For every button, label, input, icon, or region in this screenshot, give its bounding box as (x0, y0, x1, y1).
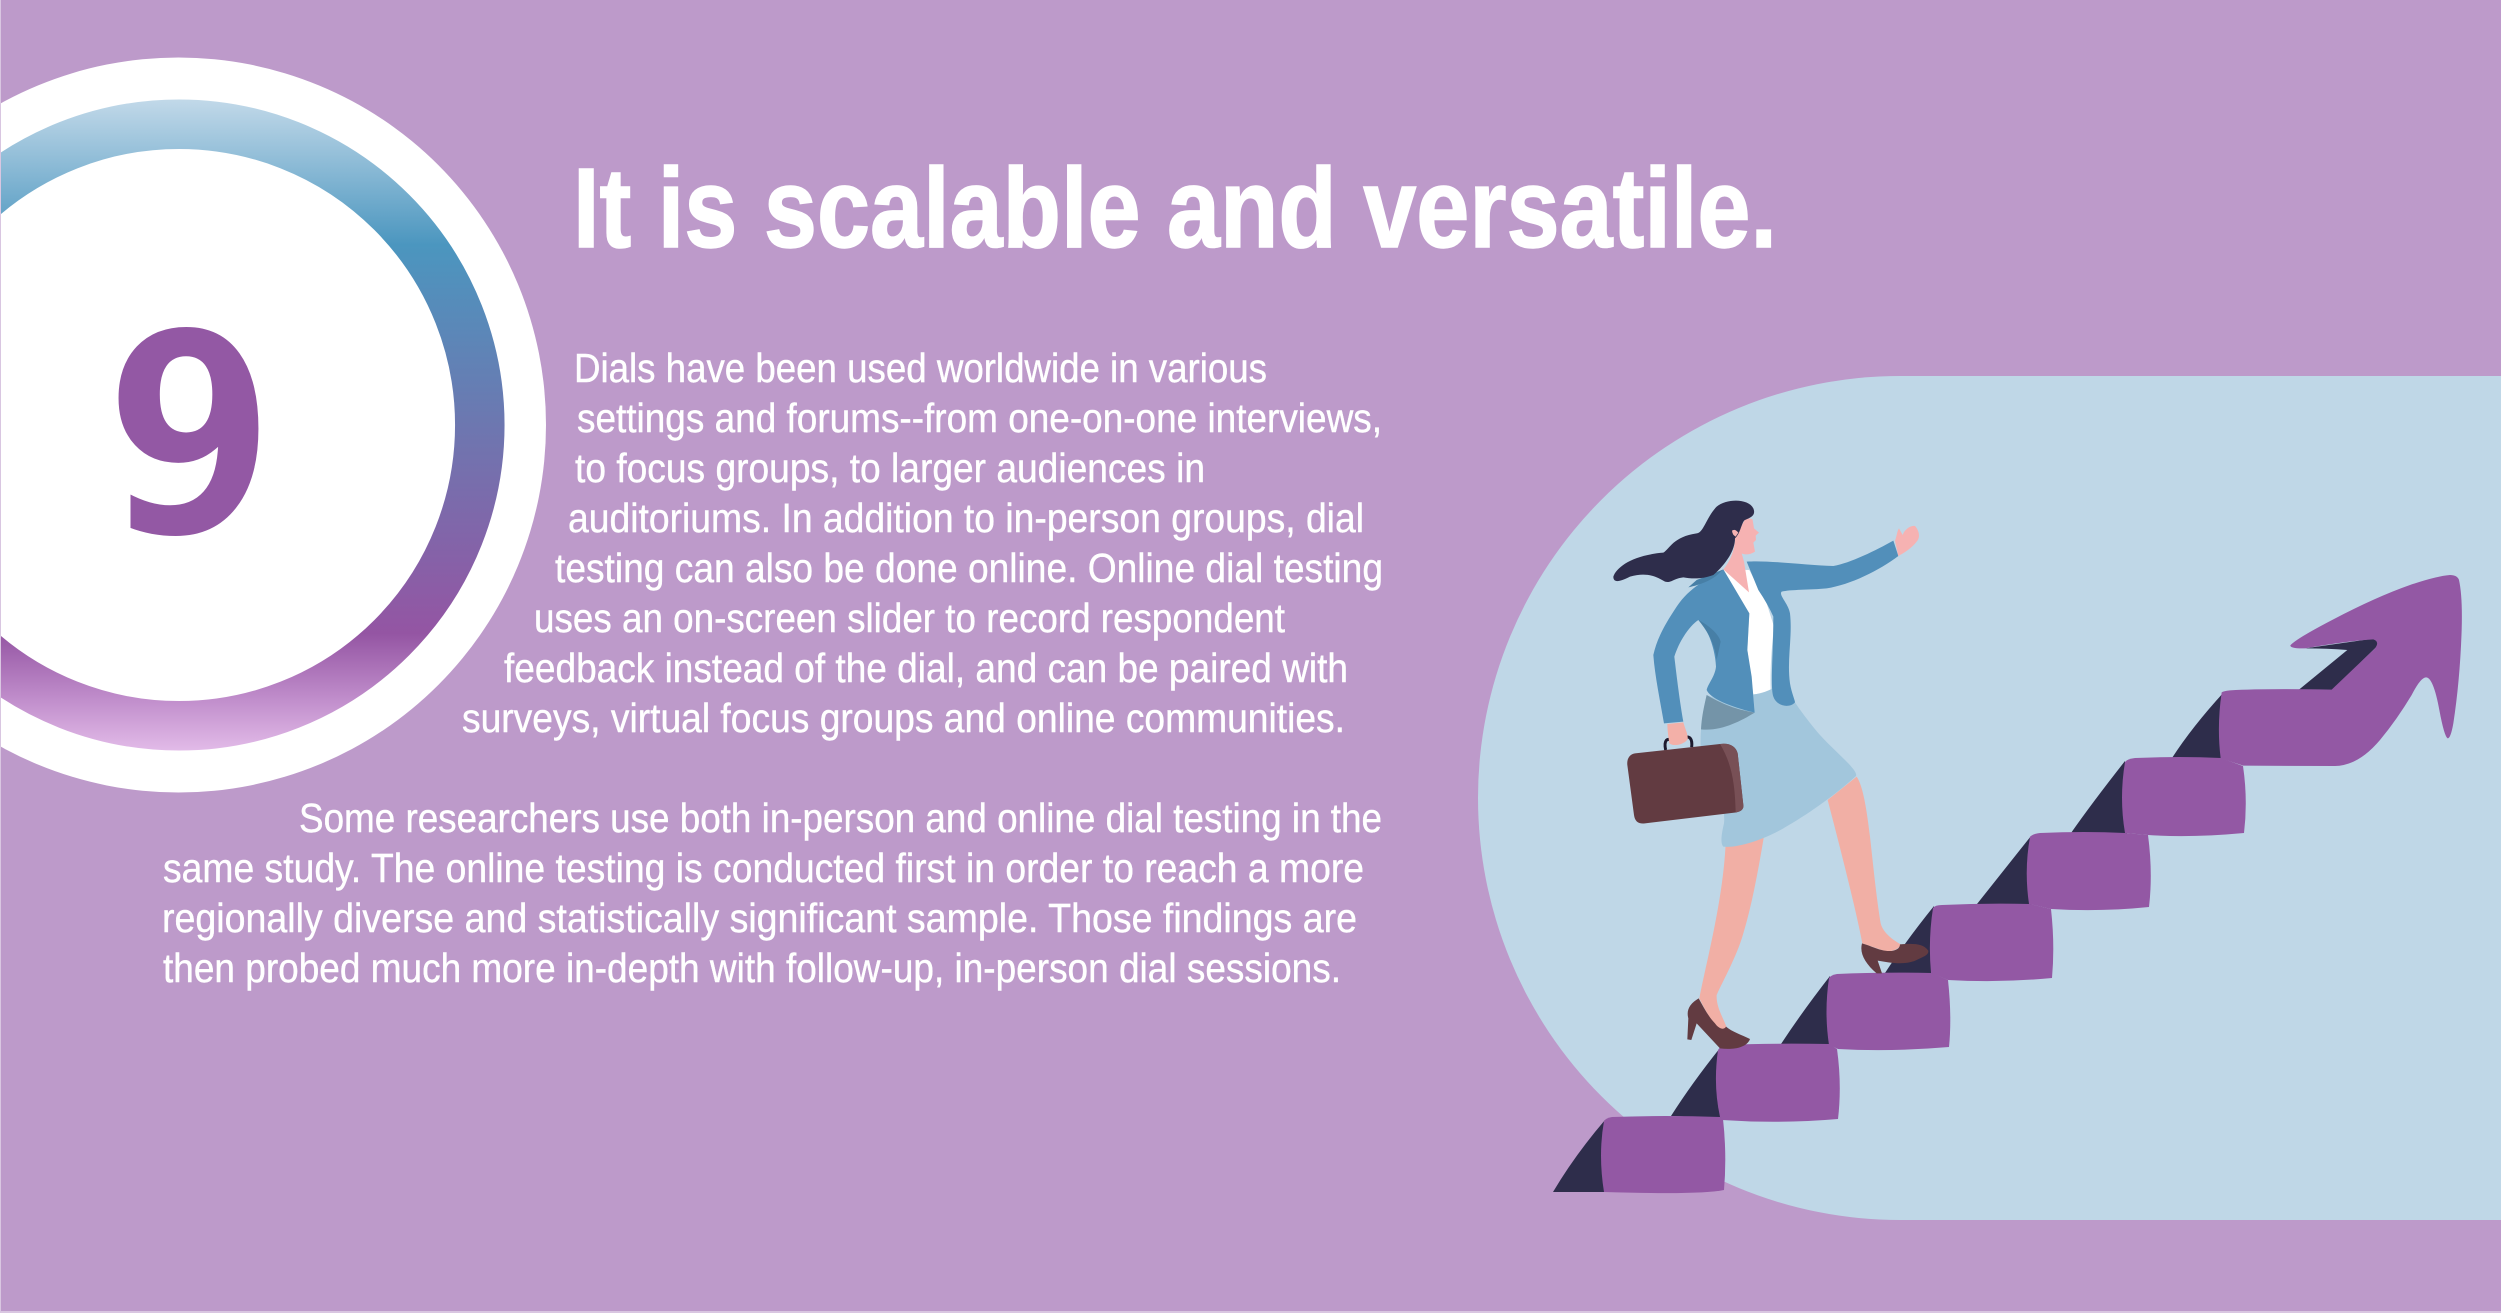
line 2: settings and forums--from one-on-one interviews, (577, 395, 1382, 441)
illustration: staircase arrow (1553, 575, 2462, 1193)
step 1 (1601, 1116, 1725, 1193)
line 7: feedback instead of the dial, and can be paired with (504, 645, 1348, 691)
raised hand (1895, 526, 1919, 556)
title: It is scalable and versatile. (573, 145, 1777, 271)
upper body (1613, 501, 1919, 847)
back shoe (1687, 998, 1750, 1049)
illustration: woman climbing (1613, 501, 1928, 1049)
panel: light blue rounded backdrop (1478, 376, 2501, 1220)
skirt shadow (1701, 695, 1755, 730)
front leg (1828, 777, 1901, 951)
neck and face (1723, 519, 1759, 592)
briefcase (1627, 744, 1743, 823)
line 2: same study. The online testing is conducted first in order to reach a more (163, 845, 1364, 891)
jacket shadows (1688, 569, 1723, 660)
line 4: then probed much more in-depth with follow-up, in-person dial sessions. (163, 945, 1341, 991)
badge: number 9: 9 (104, 272, 276, 601)
step 2 (1716, 1044, 1840, 1122)
line 8: surveys, virtual focus groups and online communities. (462, 695, 1345, 741)
arrow notch shadow (2299, 639, 2378, 691)
jacket body and left arm (1653, 569, 1755, 723)
arrow body (2219, 575, 2462, 766)
ear (1732, 530, 1738, 537)
line 3: to focus groups, to larger audiences in (575, 445, 1205, 491)
text block: first paragraph (462, 345, 1383, 741)
line 1: Dials have been used worldwide in various (574, 345, 1267, 391)
step 4 (1930, 904, 2053, 981)
back leg (1699, 830, 1765, 1031)
briefcase side panel (1720, 744, 1743, 812)
skirt (1701, 688, 1856, 847)
badge: gradient ring (0, 124, 480, 726)
jacket right side and extended arm (1747, 541, 1898, 706)
hair (1613, 501, 1754, 582)
text block: second paragraph (162, 795, 1382, 991)
step 3 (1826, 973, 1950, 1050)
stair shadows (1553, 692, 2224, 1192)
line 6: uses an on-screen slider to record respondent (534, 595, 1286, 641)
holding hand (1667, 722, 1688, 745)
line 1: Some researchers use both in-person and online dial testing in the (299, 795, 1382, 841)
step 6 (2122, 757, 2246, 836)
arrow head and top step (2219, 575, 2462, 766)
badge: white disc (0, 58, 546, 792)
step 5 (2027, 832, 2151, 910)
line 3: regionally diverse and statistically significant sample. Those findings are (162, 895, 1357, 941)
number badge (0, 58, 546, 792)
briefcase handle (1665, 737, 1692, 750)
legs and shoes (1687, 777, 1928, 1049)
front shoe (1861, 943, 1928, 973)
line 5: testing can also be done online. Online dial testing (555, 545, 1383, 591)
shirt (1723, 569, 1774, 695)
line 4: auditoriums. In addition to in-person groups, dial (568, 495, 1364, 541)
